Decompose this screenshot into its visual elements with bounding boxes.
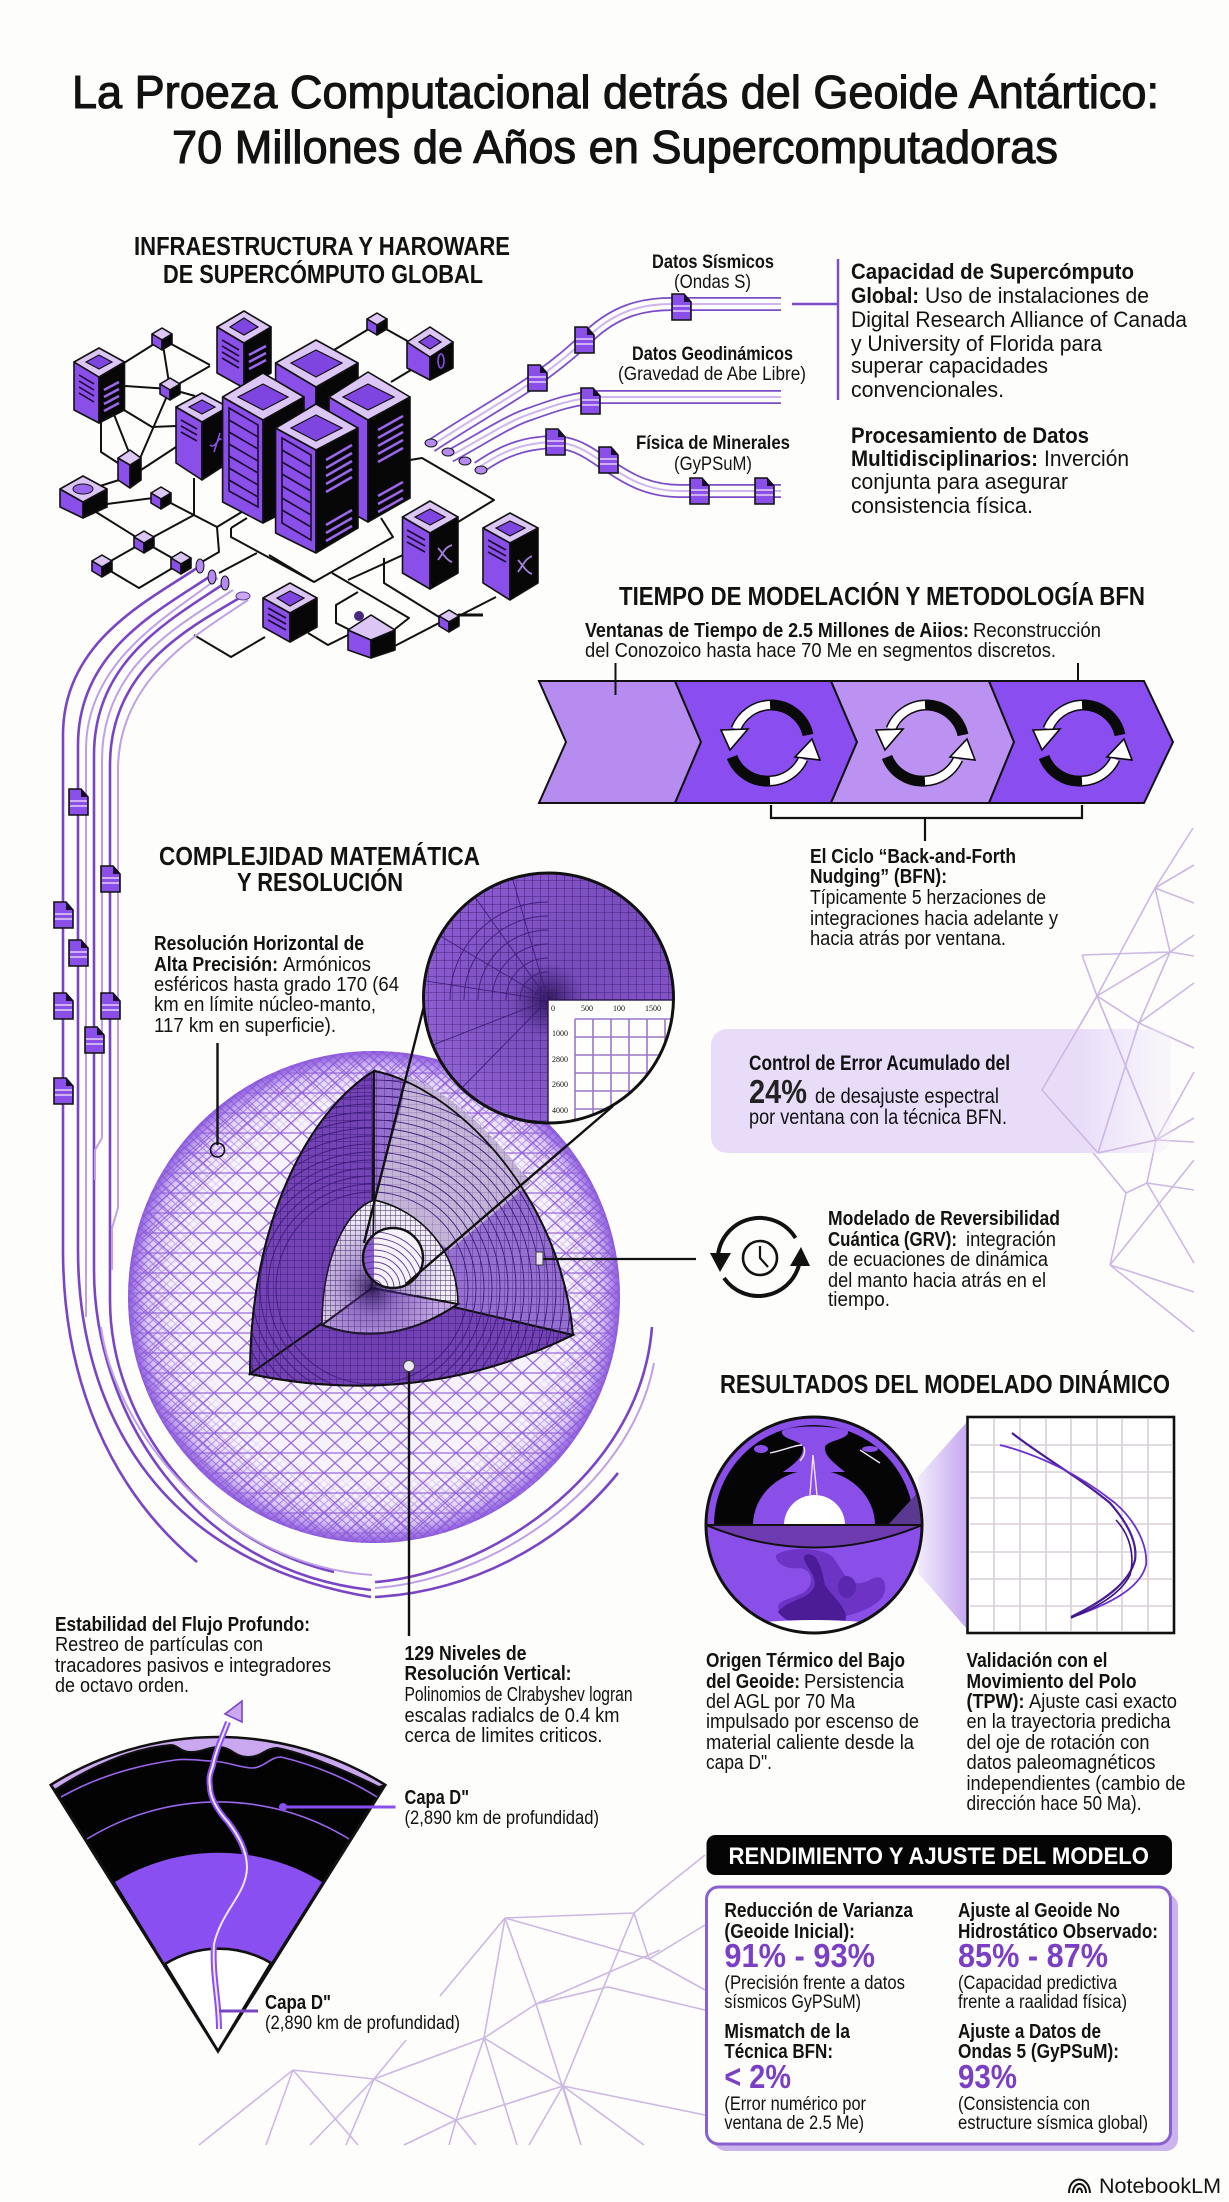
inset table: 1500 (645, 1004, 661, 1013)
white cap (769, 1620, 859, 1632)
text: validacion TPW: en la trayectoria predicha (966, 1711, 1171, 1733)
metric: ondas: (Consistencia con (958, 2094, 1090, 2115)
text: ventanas de tiempo: Ventanas de Tiempo de 2.5 Millones de Aiios: (585, 620, 969, 642)
arcs under sphere right side (375, 1327, 654, 1597)
center shading (302, 1218, 442, 1358)
text: capacidad de supercomputo (851, 259, 1188, 402)
inset table: 1000 (552, 1029, 568, 1038)
text: niveles de resolucion vertical (404, 1643, 632, 1747)
title: La Proeza Computacional detrás del Geoide Antártico: (72, 66, 1159, 118)
path line third (1071, 1520, 1132, 1618)
text: modelado de reversibilidad: tiempo. (828, 1289, 890, 1311)
sphere mesh lines (128, 1051, 620, 1543)
blob spot (838, 1576, 856, 1598)
text: modelado de reversibilidad: integración (966, 1229, 1056, 1251)
text: modelado de reversibilidad: de ecuaciones de dinámica (828, 1249, 1049, 1271)
text: estabilidad del flujo: Restreo de partículas con (55, 1634, 263, 1656)
data cable bands to the right (425, 304, 781, 491)
lower blob mid (776, 1549, 885, 1620)
connector bar to capacity text (792, 259, 838, 400)
metric: varianza: 91% - 93% (724, 1937, 875, 1974)
text: resolucion horizontal: esféricos hasta grado 170 (64 (154, 974, 399, 996)
panel: error control: 24% (749, 1073, 807, 1110)
NotebookLM logo: NotebookLM (1099, 2175, 1221, 2198)
metric: varianza (724, 1900, 914, 2013)
metric: geoide: 85% - 87% (958, 1937, 1108, 1974)
metric: geoide: (Capacidad predictiva (958, 1973, 1117, 1994)
magnified mesh circle (422, 872, 675, 1124)
text: resolucion horizontal: Alta Precisión: (154, 954, 278, 976)
text: capacidad de supercomputo: superar capacidades (851, 353, 1048, 378)
zoom circle and lens lines (363, 1228, 423, 1288)
wedge right face (372, 1071, 573, 1335)
text: capacidad de supercomputo: Uso de instalaciones de (925, 283, 1149, 308)
heading: complejidad matematica (159, 842, 480, 897)
text: procesamiento de datos: conjunta para asegurar (851, 469, 1068, 494)
text: capacidad de supercomputo: y University of Florida para (851, 331, 1103, 356)
text: ventanas de tiempo: del Conozoico hasta hace 70 Me en segmentos discretos. (585, 640, 1056, 662)
text: resolucion horizontal: 117 km en superficie). (154, 1015, 336, 1037)
diagram: mantle cross section wedge (51, 1701, 396, 2051)
inset table: 100 (613, 1004, 625, 1013)
heading: infraestructura: DE SUPERCÓMPUTO GLOBAL (163, 259, 483, 289)
metric: ondas: 93% (958, 2058, 1017, 2095)
callout marker bottom (408, 1366, 410, 1636)
background triangular mesh: bottom (199, 1855, 705, 2145)
capa D label leader (279, 1803, 287, 1811)
text: estabilidad del flujo: tracadores pasivos e integradores (55, 1655, 331, 1677)
panel: error control: por ventana con la técnica BFN. (749, 1106, 1007, 1129)
text: validacion TPW: datos paleomagnéticos (966, 1752, 1156, 1774)
core right (372, 1200, 458, 1304)
text: capacidad de supercomputo: convencionales. (851, 377, 1004, 402)
metric: ondas: Ondas 5 (GyPSuM): (958, 2041, 1119, 2063)
metric: ondas: Ajuste a Datos de (958, 2021, 1101, 2043)
text: capa D lower label: Capa D" (265, 1992, 331, 2014)
header bar: rendimiento: RENDIMIENTO Y AJUSTE DEL MODELO (728, 1843, 1149, 1870)
text: ciclo BFN: integraciones hacia adelante y (810, 908, 1058, 930)
wedge left face (250, 1071, 374, 1374)
text: origen termico: impulsado por escenso de (706, 1711, 919, 1733)
server: right rack one (402, 501, 458, 589)
document icons on left cables (54, 789, 120, 1104)
text: modelado de reversibilidad (828, 1208, 1060, 1311)
chevron timeline (539, 663, 1173, 841)
data source labels: Física de Minerales (636, 433, 790, 454)
wedge outer edge (250, 1071, 573, 1386)
metric: mismatch: Técnica BFN: (724, 2041, 833, 2063)
text: resolucion horizontal (154, 933, 399, 1037)
data source labels: Datos Sísmicos (652, 252, 774, 273)
text: capa D upper label: (2,890 km de profundidad) (404, 1808, 599, 1829)
heading: resultados: RESULTADOS DEL MODELADO DINÁMICO (720, 1370, 1170, 1399)
text: ciclo BFN: hacia atrás por ventana. (810, 928, 1006, 950)
metric: varianza: (Geoide Inicial): (724, 1921, 855, 1943)
tall small node (118, 450, 141, 488)
wedge upper grey band (374, 1075, 530, 1250)
text: ventanas de tiempo (585, 620, 1101, 662)
box: bottom (263, 583, 317, 642)
white dome (784, 1495, 845, 1525)
text: niveles de resolucion vertical: 129 Niveles de (404, 1643, 526, 1665)
text: niveles de resolucion vertical: Resolución Vertical: (404, 1663, 572, 1685)
metric: varianza: (Precisión frente a datos (724, 1973, 905, 1994)
text: capacidad de supercomputo: Capacidad de Supercómputo (851, 259, 1134, 284)
metric: mismatch: < 2% (724, 2058, 791, 2095)
network connection lines (96, 324, 496, 657)
text: niveles de resolucion vertical: cerca de limites criticos. (404, 1725, 602, 1747)
path line observed (1012, 1433, 1135, 1617)
sphere dense rim mesh (128, 1051, 620, 1543)
callout ticks (616, 663, 1078, 695)
text: niveles de resolucion vertical: Polinomios de Clrabyshev logran (404, 1684, 632, 1706)
thin boundary line lower (87, 1802, 349, 1839)
panel: error control (711, 1029, 1171, 1153)
title: 70 Millones de Años en Supercomputadoras (172, 121, 1058, 173)
heading: complejidad matematica: Y RESOLUCIÓN (237, 867, 403, 897)
rising plume arrow (209, 1701, 247, 2029)
text: niveles de resolucion vertical: escalas radialcs de 0.4 km (404, 1705, 620, 1727)
chart: polar wander path (968, 1417, 1174, 1633)
text: procesamiento de datos: consistencia física. (851, 493, 1033, 518)
text: validacion TPW: dirección hace 50 Ma). (966, 1793, 1142, 1815)
heading: complejidad matematica: COMPLEJIDAD MATEMÁTICA (159, 842, 480, 871)
server: left rack (74, 348, 124, 423)
server: top rack (217, 311, 271, 388)
small node cubes (92, 313, 459, 632)
metric: mismatch: (Error numérico por (724, 2094, 867, 2115)
text: validacion TPW (966, 1650, 1186, 1815)
tonal gradient (424, 873, 674, 1123)
text: modelado de reversibilidad: Modelado de Reversibilidad (828, 1208, 1060, 1230)
server: tower right (329, 372, 410, 522)
text: procesamiento de datos: Multidisciplinarios: (851, 446, 1038, 471)
text: estabilidad del flujo: Estabilidad del Flujo Profundo: (55, 1614, 310, 1636)
wedge bottom face (250, 1288, 573, 1386)
text: ciclo BFN (810, 846, 1058, 950)
inset table: 0 (551, 1004, 555, 1013)
chevron 3 (831, 681, 1014, 803)
text: modelado de reversibilidad: del manto hacia atrás en el (828, 1270, 1046, 1292)
text: estabilidad del flujo: de octavo orden. (55, 1675, 189, 1697)
inset table: 4000 (552, 1106, 568, 1115)
metric: mismatch (724, 2021, 867, 2134)
panel: model performance (706, 1887, 1178, 2151)
data source labels: (Ondas S) (674, 272, 751, 293)
server: middle rack (176, 393, 228, 480)
plume (782, 1426, 848, 1472)
metric: ondas: estructure sísmica global) (958, 2113, 1148, 2134)
heading: tiempo de modelacion: TIEMPO DE MODELACIÓN Y METODOLOGÍA BFN (619, 581, 1145, 611)
text: capacidad de supercomputo: Global: (851, 283, 919, 308)
metric: geoide: Ajuste al Geoide No (958, 1900, 1120, 1922)
server: right rack two (483, 513, 538, 600)
metric: mismatch: ventana de 2.5 Me) (724, 2113, 864, 2134)
metric: varianza: sísmicos GyPSuM) (724, 1992, 861, 2013)
server: tower left (223, 373, 304, 523)
text: estabilidad del flujo (55, 1614, 331, 1697)
inset table: 500 (581, 1004, 593, 1013)
panel card (706, 1887, 1170, 2144)
text: capa D lower label: (2,890 km de profundidad) (265, 2013, 460, 2034)
text: validacion TPW: Validación con el (966, 1650, 1108, 1672)
server cluster (60, 311, 538, 658)
panel: error control: Control de Error Acumulado del (749, 1052, 1010, 1075)
text: origen termico: Origen Térmico del Bajo (706, 1650, 905, 1672)
data source labels (618, 252, 806, 475)
lens band (706, 1525, 922, 1548)
document icons on data bands (528, 294, 774, 504)
server: tower front (276, 404, 358, 553)
data source labels: (GyPSuM) (674, 454, 752, 475)
text: resolucion horizontal: Resolución Horizontal de (154, 933, 364, 955)
cycle icon 3 (1033, 705, 1132, 781)
metric: geoide (958, 1900, 1158, 2013)
lower leader (219, 2010, 258, 2012)
text: origen termico: capa D". (706, 1752, 772, 1774)
mesh overlay on panel (1042, 996, 1156, 1153)
panel shadow (714, 1894, 1178, 2151)
purple ring (753, 1470, 875, 1525)
heading: infraestructura (134, 233, 510, 289)
header bar: rendimiento (706, 1835, 1172, 1875)
crust lilac (51, 1737, 385, 1790)
panel: error control: de desajuste espectral (815, 1085, 999, 1108)
text: ciclo BFN: Nudging” (BFN): (810, 866, 947, 888)
concentric wedge shells (251, 1080, 570, 1384)
lower blob dark (778, 1554, 846, 1627)
metric: ondas (958, 2021, 1148, 2134)
mantle black fill (51, 1737, 385, 2051)
path line predicted (1000, 1445, 1146, 1615)
text: procesamiento de datos: Inverción (1044, 446, 1129, 471)
cycle icon 1 (721, 705, 820, 781)
text: origen termico: Persistencia (804, 1671, 905, 1693)
background triangular mesh: right (1042, 828, 1194, 1332)
sphere body (128, 1051, 620, 1543)
icon: clock with reverse arrows (710, 1218, 810, 1296)
text: origen termico: del AGL por 70 Ma (706, 1691, 856, 1713)
illustration: thermal origin sphere (706, 1417, 922, 1640)
text: capa D lower label (265, 1992, 460, 2034)
text: capa D upper label (404, 1787, 599, 1829)
callout marker right (540, 1258, 696, 1260)
box: flat left (60, 476, 107, 518)
chevron 2 (675, 681, 857, 803)
text: validacion TPW: (TPW): (966, 1691, 1024, 1713)
text: validacion TPW: Movimiento del Polo (966, 1671, 1136, 1693)
core bottom (322, 1288, 458, 1334)
metric: varianza: Reducción de Varianza (724, 1900, 914, 1922)
text: validacion TPW: independientes (cambio de (966, 1773, 1186, 1795)
inset table (548, 1000, 680, 1125)
text: capa D upper label: Capa D" (404, 1787, 469, 1809)
curved mesh shells (410, 860, 548, 1130)
text: procesamiento de datos (851, 423, 1129, 518)
upper black mantle (714, 1425, 914, 1525)
text: origen termico: del Geoide: (706, 1671, 800, 1693)
text: origen termico (706, 1650, 919, 1774)
text: validacion TPW: del oje de rotación con (966, 1732, 1150, 1754)
metric: mismatch: Mismatch de la (724, 2021, 851, 2043)
box: security icon (348, 611, 395, 658)
text: resolucion horizontal: km en límite núcleo-manto, (154, 994, 376, 1016)
zoom cone between sphere and chart (918, 1423, 966, 1628)
sphere mesh with wedge (128, 1002, 696, 1636)
left long cables wrapping the sphere (63, 559, 372, 1597)
squiggles (770, 1445, 880, 1495)
title (72, 66, 1159, 173)
cycle icon 2 (876, 705, 975, 781)
inner white apex (165, 1949, 271, 2051)
box: top right (407, 327, 453, 380)
text: modelado de reversibilidad: Cuántica (GRV): (828, 1229, 957, 1251)
heading: infraestructura: INFRAESTRUCTURA Y HAROWARE (134, 233, 510, 261)
text: ciclo BFN: Típicamente 5 herzaciones de (810, 887, 1046, 909)
chevron 4 (989, 681, 1173, 803)
text: validacion TPW: Ajuste casi exacto (1029, 1691, 1177, 1713)
sphere edge shading (128, 1051, 620, 1543)
callout marker left (216, 1043, 219, 1145)
outer core purple band (115, 1853, 322, 1964)
chevron 1 (539, 681, 701, 803)
server: back central tower (276, 340, 358, 440)
text: capacidad de supercomputo: Digital Research Alliance of Canada (851, 307, 1188, 332)
data source labels: Datos Geodinámicos (632, 344, 793, 365)
text: procesamiento de datos: Procesamiento de Datos (851, 423, 1089, 448)
thin boundary line upper (61, 1757, 377, 1797)
inset table: 2800 (552, 1055, 568, 1064)
text: origen termico: material caliente desde la (706, 1732, 915, 1754)
zoom circle arcs (364, 1229, 422, 1287)
text: ventanas de tiempo: Reconstrucción (973, 620, 1101, 642)
metric: geoide: Hidrostático Observado: (958, 1921, 1158, 1943)
metric: geoide: frente a raalidad física) (958, 1992, 1127, 2013)
side shade (889, 1494, 920, 1524)
core left (322, 1200, 374, 1325)
text: ciclo BFN: El Ciclo “Back-and-Forth (810, 846, 1016, 868)
inset table: 2600 (552, 1080, 568, 1089)
bracket (771, 805, 1082, 841)
data source labels: (Gravedad de Abe Libre) (618, 364, 806, 385)
text: resolucion horizontal: Armónicos (283, 954, 371, 976)
